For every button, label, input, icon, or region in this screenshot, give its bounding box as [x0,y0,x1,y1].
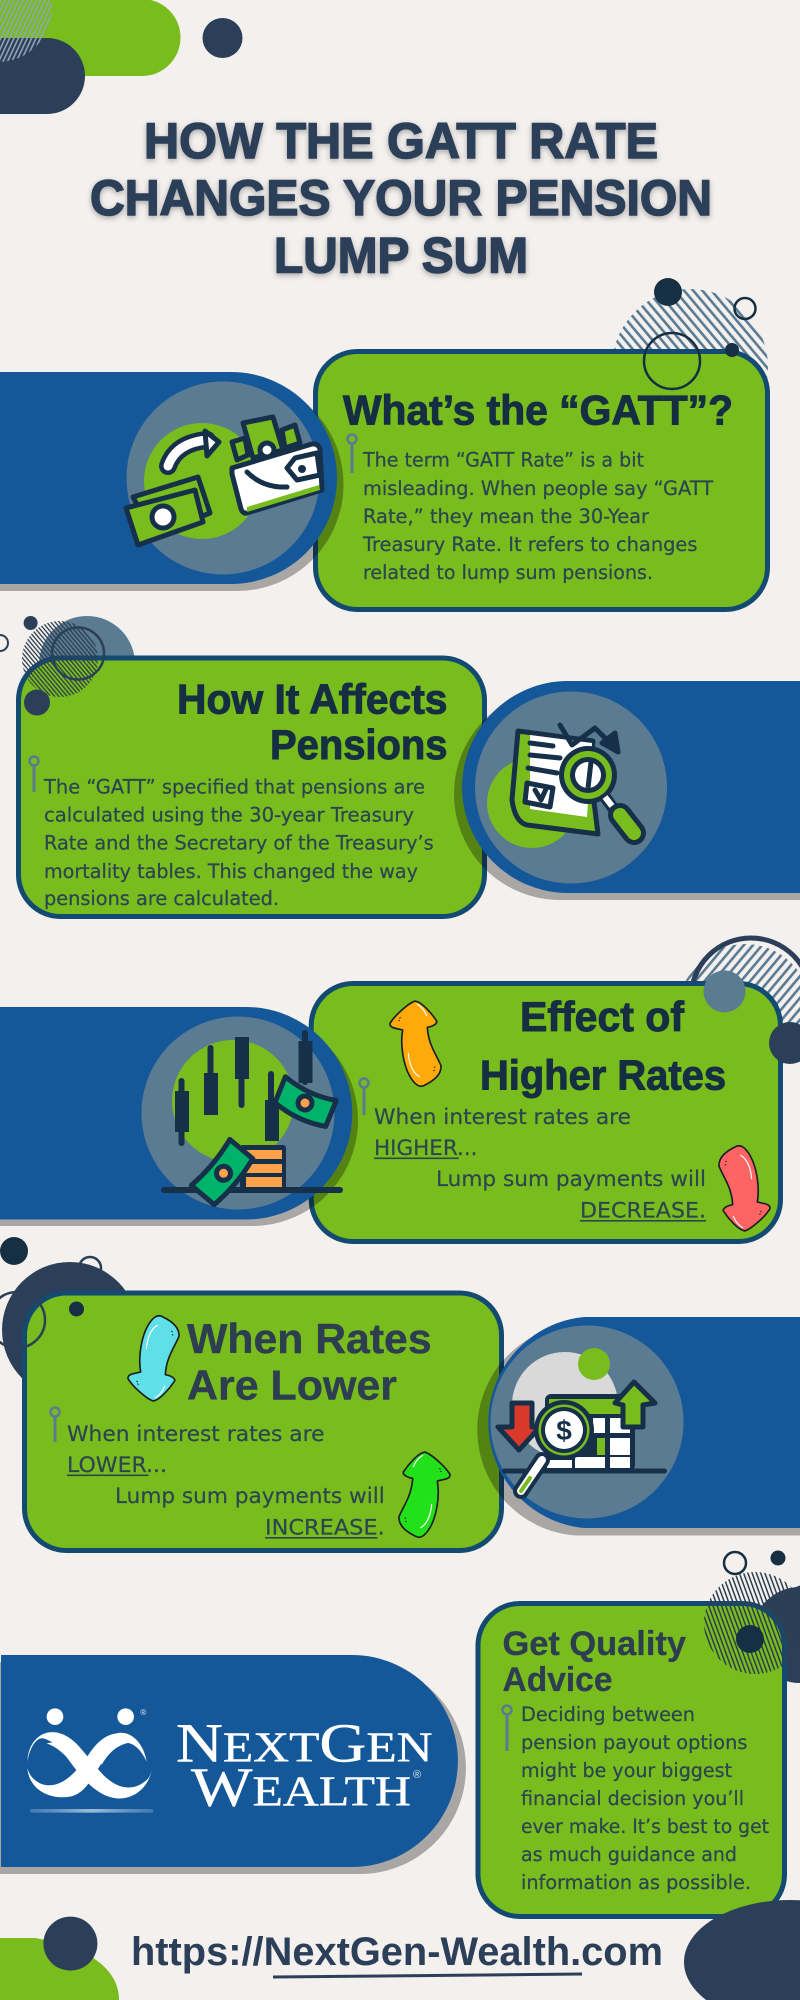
dollar sign: $ [556,1415,572,1446]
decoration: bottom-left shapes [0,1917,119,2000]
heading: effect of higher rates: Effect of [520,993,685,1040]
title: HOW THE GATT RATE [144,113,658,169]
decoration: section 4 behind [0,1237,138,1398]
logo wordmark: NEXT GEN [176,1712,432,1774]
body text: as much guidance and [521,1843,737,1866]
body text [521,1703,769,1894]
heading: how it affects pensions [177,676,448,768]
heading: how it affects pensions: How It Affects [177,676,448,722]
panel: effect of higher rates [311,984,780,1242]
decoration: section 5 front [704,1572,800,1674]
body text: financial decision you’ll [521,1787,744,1810]
pill: section 4 blue [477,1317,800,1536]
body text: information as possible. [521,1871,751,1894]
pin marker [350,444,354,473]
body text: misleading. When people say “GATT [363,477,713,500]
registered mark: ® [140,1708,146,1717]
body text [362,448,713,584]
pill: section 3 blue [0,1007,358,1226]
body text: Rate,” they mean the 30-Year [363,505,650,528]
heading: when rates are lower [187,1315,432,1408]
body text: When interest rates are [67,1422,324,1447]
body text: The term “GATT Rate” is a bit [362,448,644,472]
decoration: section 3 behind [679,938,800,1076]
body text [374,1105,706,1223]
body text [43,776,434,910]
icon: table, arrows and magnifier [498,1382,667,1491]
icon: orange up arrow [390,1001,441,1086]
decoration: section 2 behind [39,616,135,712]
body text: Lump sum payments will [436,1167,706,1192]
title: CHANGES YOUR PENSION [90,170,712,226]
website url: https://NextGen-Wealth.com [131,1930,663,1974]
body text: pension payout options [521,1731,747,1754]
decoration: section 1 hatch [612,289,768,445]
pill: section 2 blue [454,681,800,900]
body text: LOWER... [67,1453,167,1478]
panel: what's the GATT [316,352,768,610]
logo wordmark: WEALTH [191,1757,411,1818]
decoration: bottom-right shape [684,1900,800,2000]
heading: when rates are lower: Are Lower [187,1362,397,1408]
heading: effect of higher rates: Higher Rates [480,1052,726,1099]
body text [67,1422,385,1540]
body text: The “GATT” specified that pensions are [43,776,425,799]
body text: DECREASE. [580,1198,706,1223]
pin ring [348,434,356,444]
pin marker [50,1408,60,1442]
icon: document and magnifier [512,725,634,834]
panel: when rates are lower [24,1293,502,1550]
body text: pensions are calculated. [44,887,279,910]
title [90,113,712,284]
panel: how it affects pensions [18,658,484,916]
heading: effect of higher rates [480,993,726,1099]
icon: green up arrow [399,1452,450,1537]
body text: calculated using the 30-year Treasury [44,803,414,826]
body text: Deciding between [521,1703,695,1726]
body text: HIGHER... [374,1136,478,1161]
logo pill [0,1655,466,1874]
icon: wallet and cash [126,417,322,545]
icon: candlestick chart with cash [161,1030,343,1206]
pill: section 1 blue [0,372,344,591]
decoration: section 1 dots and rings [644,278,756,389]
heading: what's the GATT: What’s the “GATT”? [343,386,733,434]
heading: when rates are lower: When Rates [187,1315,432,1362]
decoration: section 2 front [0,616,104,716]
panel: get quality advice [478,1604,784,1916]
logo mark: infinity with figures [27,1708,153,1813]
body text: Rate and the Secretary of the Treasury’s [44,832,434,855]
heading: get quality advice [502,1625,686,1699]
icon: blue down arrow [128,1316,179,1401]
decoration: top-left shapes [0,0,242,114]
heading: get quality advice: Get Quality [502,1625,686,1663]
body text: INCREASE. [265,1516,385,1540]
body text: Lump sum payments will [115,1484,385,1509]
pin marker [30,756,38,792]
decoration: section 5 behind [724,1550,800,1683]
body text: mortality tables. This changed the way [44,860,418,883]
icon: red down arrow [719,1146,770,1231]
logo wordmark [176,1712,432,1818]
decoration: section 4 rings [0,1257,101,1348]
title: LUMP SUM [274,228,528,284]
body text: ever make. It’s best to get [521,1815,769,1838]
body text: Treasury Rate. It refers to changes [362,533,698,556]
pin marker [502,1706,512,1751]
body text: might be your biggest [521,1759,732,1782]
body text: related to lump sum pensions. [363,561,653,584]
heading: get quality advice: Advice [502,1661,612,1699]
pin marker [360,1078,368,1115]
decoration: section 3 front dots [704,970,800,1064]
logo wordmark: ® [413,1769,421,1781]
heading: how it affects pensions: Pensions [270,721,448,768]
body text: When interest rates are [374,1105,631,1130]
